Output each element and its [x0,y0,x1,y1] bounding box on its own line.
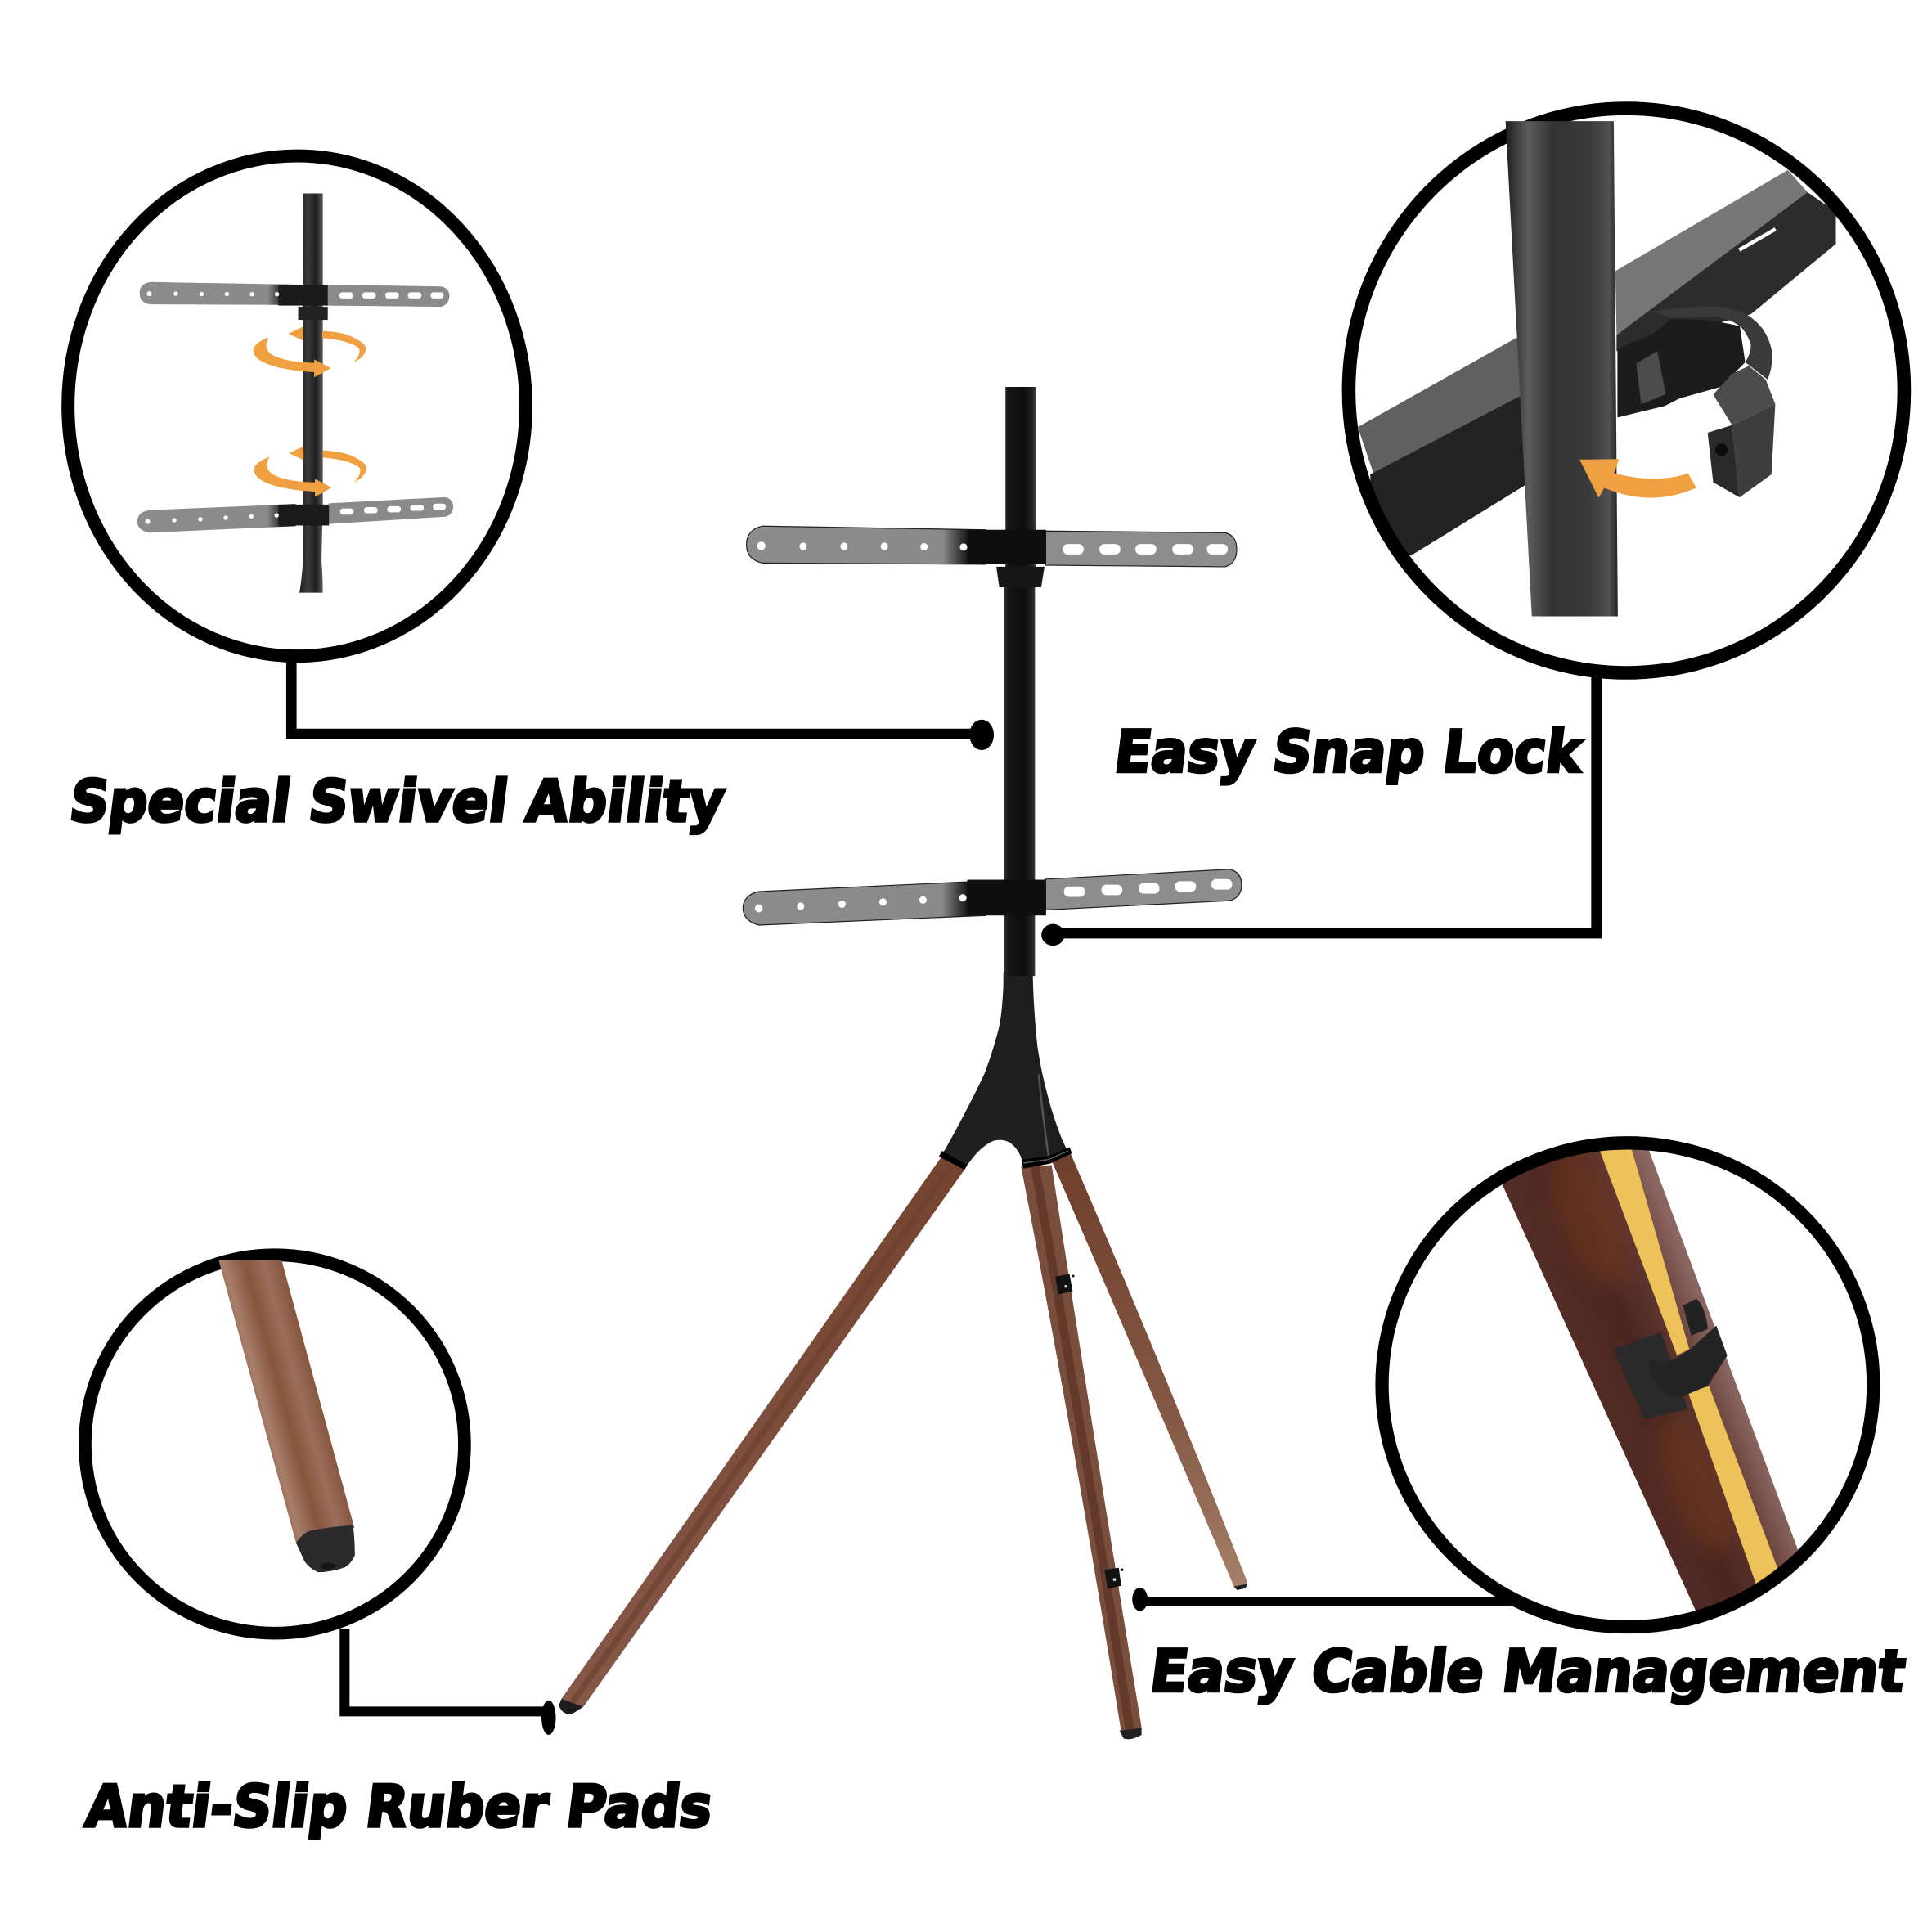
stand leg: front middle wood leg [1021,1166,1142,1739]
crossbar behind pole [1358,170,1836,555]
orange closing arrow [1579,459,1696,498]
rubber foot [296,1525,355,1572]
connector: snap lock callout line [1041,672,1597,946]
ring outline [1382,1143,1873,1627]
mini lower bracket [137,497,453,532]
feature label: swivel: Special Swivel Ability [66,767,729,835]
mini upper bracket [140,282,449,320]
orange swivel arrow lower [254,447,366,497]
callout circle: anti-slip pad detail [85,1255,465,1633]
stand leg: left wood leg [559,1157,964,1714]
cable clip front ring [1647,1326,1728,1397]
central pole [1004,387,1036,976]
orange swivel arrow upper [254,326,366,377]
lower mounting bracket [743,869,1242,925]
callout circle: snap lock detail [1349,109,1904,672]
tripod black junction [939,973,1072,1170]
mini pole [299,194,323,593]
stand leg: rear right wood leg [1052,1153,1247,1590]
callout circle: cable management detail [1382,1139,1873,1627]
cable clip upper [1055,1274,1075,1294]
connector: rubber pads callout line [344,1629,556,1735]
upper mounting bracket [747,526,1237,587]
feature label: cable management: Easy Cable Management [1147,1638,1909,1705]
ring outline [1349,109,1904,672]
cable clip back plate [1613,1299,1708,1419]
wood leg close-up [1502,1150,1798,1611]
yellow cable [1596,1139,1781,1589]
callout circle: swivel detail [68,156,526,656]
large pole [1506,121,1618,616]
clamp body [1617,306,1775,497]
feature label: snap lock: Easy Snap Lock [1111,718,1588,786]
connector: swivel callout line [291,657,994,750]
connector: cable management callout line [1132,1588,1511,1611]
main product: tripod TV stand [559,387,1247,1739]
wood leg close-up [218,1260,354,1543]
cable clip lower [1104,1568,1123,1588]
feature label: rubber pads: Anti-Slip Ruber Pads [82,1772,717,1840]
